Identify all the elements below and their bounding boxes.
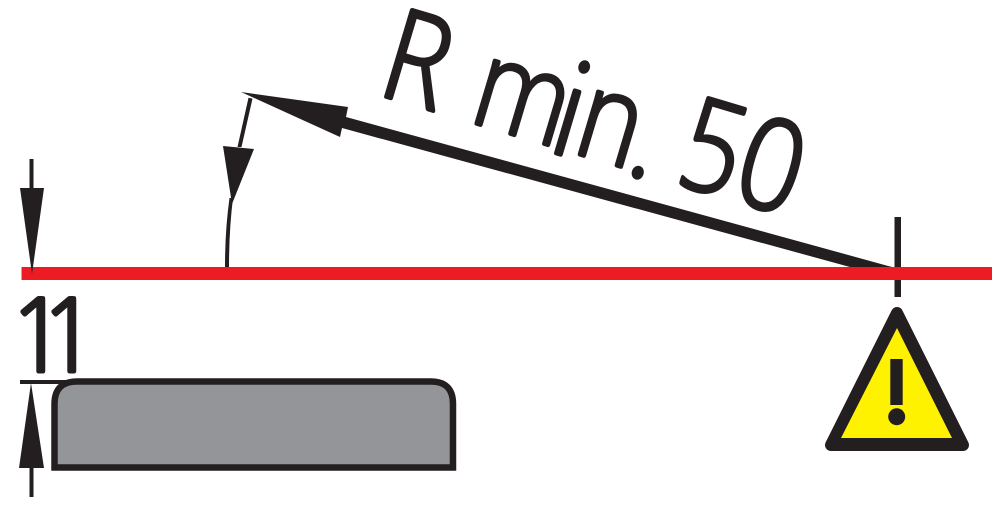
icon: warning triangle — [831, 313, 963, 445]
dimension extension line — [20, 380, 70, 384]
tick mark: bend point — [894, 217, 901, 297]
arrow: radius leader line — [241, 92, 892, 267]
arrow: bottom dimension — [19, 383, 44, 497]
arrow: curved angle dimension — [223, 98, 254, 267]
reference line: red — [22, 267, 992, 280]
arrow: top dimension — [20, 159, 44, 274]
material cross-section — [54, 382, 453, 468]
dimension value: 11: 11 — [7, 286, 99, 387]
